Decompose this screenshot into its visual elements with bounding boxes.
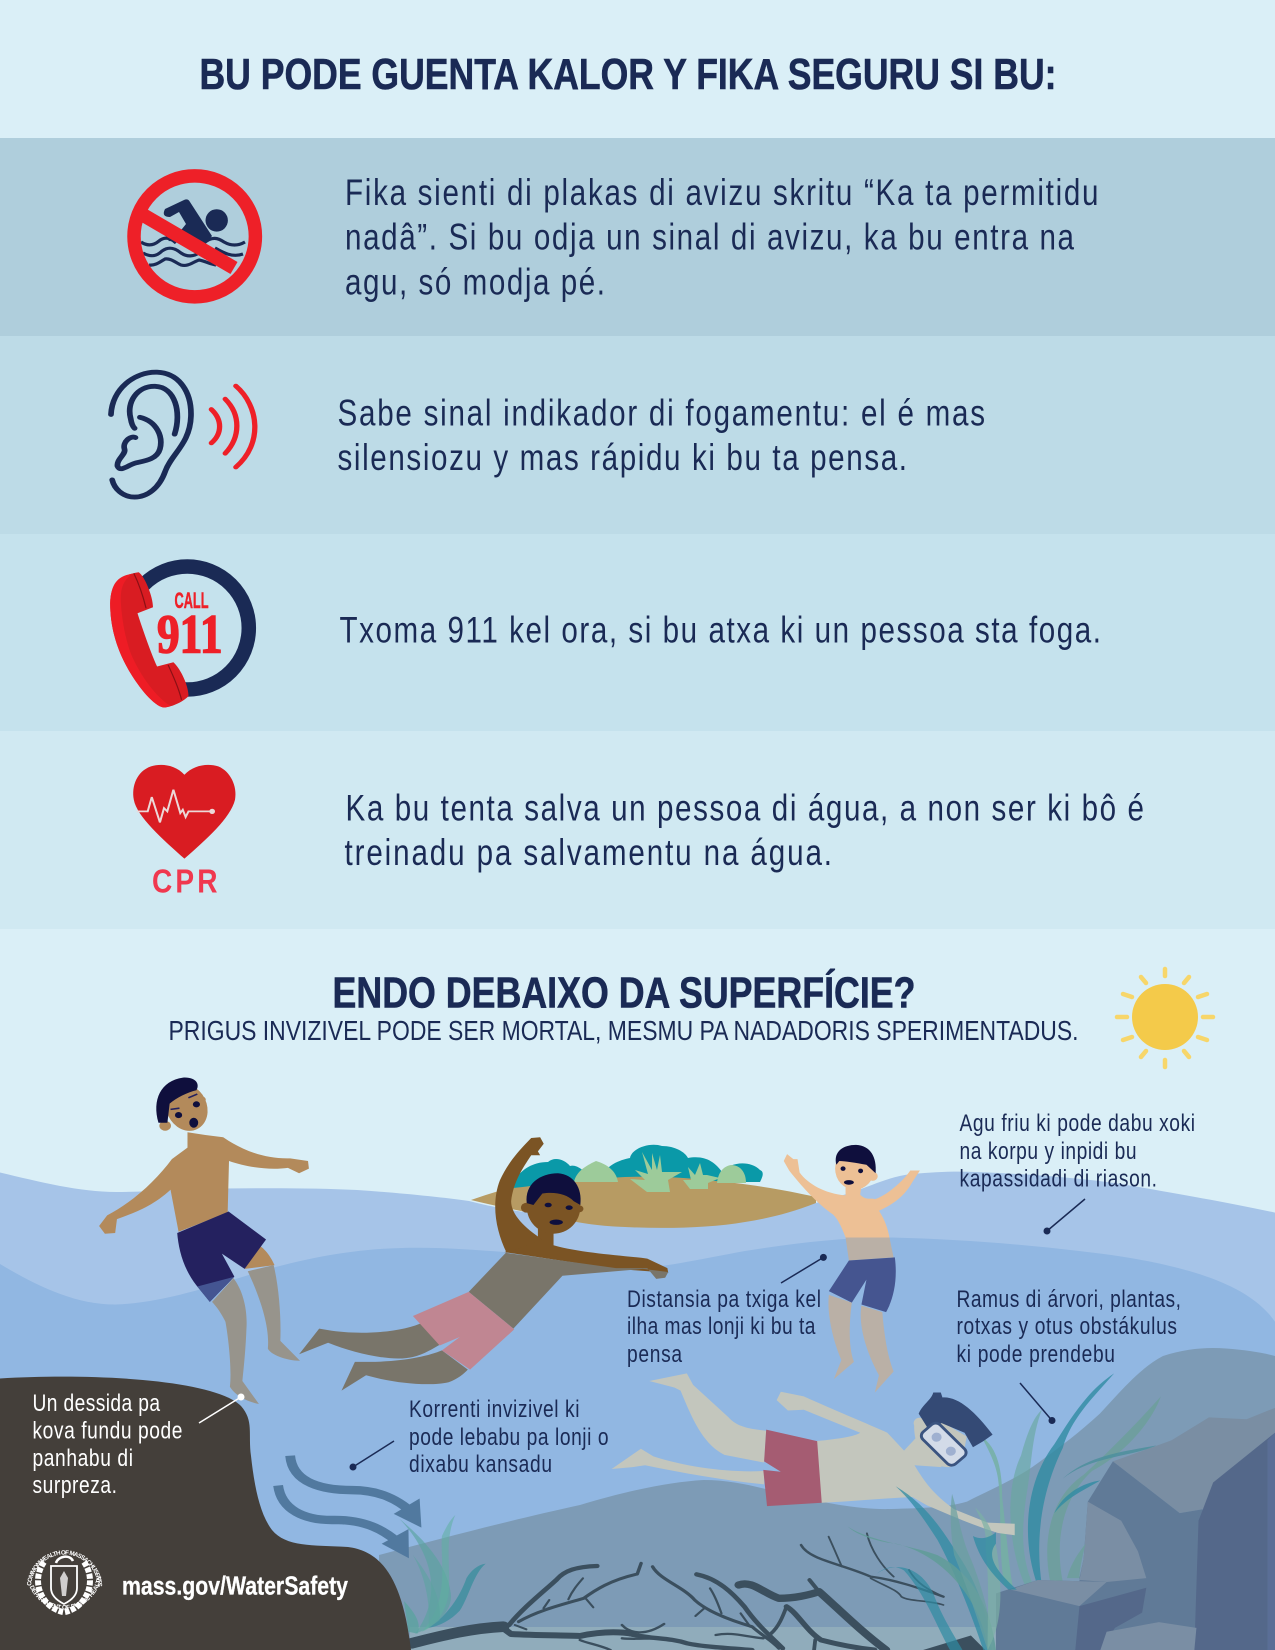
shore: dark drop-off land [0, 1377, 411, 1650]
icon: heart CPR [133, 765, 235, 900]
callout: obstacles: Ramus di árvori, plantas, [956, 1285, 1181, 1313]
text: row 2: Sabe sinal indikador di fogamentu: el é mas [338, 393, 985, 434]
callout: obstacles [956, 1285, 1181, 1424]
icon: ear with sound waves [111, 372, 255, 497]
title: BU PODE GUENTA KALOR Y FIKA SEGURU SI BU: [200, 50, 1056, 99]
logo: public health seal [27, 1550, 102, 1615]
callout: currents [350, 1395, 609, 1478]
plant: left seaweed [400, 1515, 486, 1634]
callout: drop-off: surpreza. [32, 1471, 117, 1499]
seabed [379, 1348, 1275, 1650]
icon: phone call 911: CALL [174, 588, 208, 613]
callout: drop-off: panhabu di [32, 1444, 133, 1472]
callout: obstacles: ki pode prendebu [956, 1340, 1115, 1368]
callout: distance [627, 1254, 827, 1368]
icon: sun [1117, 969, 1213, 1067]
logo: public health seal: COMMONWEALTH OF MASSACHUSETTS [27, 1550, 102, 1587]
panel: drowning signs [0, 336, 1275, 534]
text: row 1: nadâ”. Si bu odja un sinal di avizu, ka bu entra na [345, 218, 1074, 258]
callout: cold water: na korpu y inpidi bu [960, 1137, 1137, 1165]
swimmer: snorkeler [612, 1373, 1015, 1535]
icon: phone call 911 [110, 566, 249, 708]
swimmer: boy with pink shorts [299, 1137, 668, 1391]
plant: right seaweed front [848, 1486, 1196, 1650]
branches on seabed [411, 1533, 943, 1650]
callout: distance: pensa [627, 1340, 683, 1368]
text: row 2: silensiozu y mas rápidu ki bu ta pensa. [338, 438, 907, 479]
text: row 1: Fika sienti di plakas di avizu skritu “Ka ta permitidu [345, 173, 1099, 214]
swimmer: boy with blue shorts [784, 1145, 920, 1393]
plant: right seaweed back [981, 1373, 1161, 1586]
text: row 2 [338, 393, 985, 479]
icon: phone call 911: 911 [157, 604, 222, 664]
link: website: mass.gov/WaterSafety [122, 1571, 348, 1601]
text: row 3: Txoma 911 kel ora, si bu atxa ki un pessoa sta foga. [340, 611, 1101, 652]
callout: drop-off: Un dessida pa [32, 1389, 161, 1417]
text: row 1 [345, 173, 1099, 303]
subheading: PRIGUS INVIZIVEL PODE SER MORTAL, MESMU PA NADADORIS SPERIMENTADUS. [168, 1015, 1078, 1046]
callout: distance: Distansia pa txiga kel [627, 1285, 821, 1313]
arrows: invisible currents [278, 1456, 421, 1558]
rocks [1079, 1408, 1275, 1650]
island with bushes [471, 1145, 816, 1228]
icon: heart CPR: CPR [152, 864, 217, 900]
callout: drop-off [32, 1389, 244, 1499]
text: row 4: Ka bu tenta salva un pessoa di água, a non ser ki bô é [346, 789, 1144, 830]
text: row 1: agu, só modja pé. [345, 262, 605, 303]
water: surface layer [0, 1172, 1275, 1650]
callout: currents: Korrenti invizivel ki [409, 1395, 579, 1423]
logo: public health seal: DEPARTMENT OF PUBLIC HEALTH [30, 1576, 102, 1610]
callout: drop-off: kova fundu pode [32, 1416, 183, 1444]
callout: cold water: Agu friu ki pode dabu xoki [960, 1109, 1195, 1137]
callout: currents: pode lebabu pa lonji o [409, 1423, 609, 1451]
heading: under the surface: ENDO DEBAIXO DA SUPERFÍCIE? [332, 968, 916, 1018]
icon: no swimming sign [134, 176, 255, 297]
panel: CPR [0, 731, 1275, 929]
callout: distance: ilha mas lonji ki bu ta [627, 1312, 816, 1340]
swimmer: boy with navy shorts [99, 1078, 309, 1404]
callout: cold water [960, 1109, 1195, 1234]
water: deep layer [0, 1237, 1275, 1650]
callout: currents: dixabu kansadu [409, 1450, 552, 1478]
callout: obstacles: rotxas y otus obstákulus [956, 1312, 1177, 1340]
callout: cold water: kapassidadi di riason. [960, 1165, 1157, 1192]
text: row 4 [344, 789, 1144, 874]
text: row 4: treinadu pa salvamentu na água. [344, 833, 832, 874]
panel: call 911 [0, 534, 1275, 731]
panel: warning signs [0, 138, 1275, 336]
